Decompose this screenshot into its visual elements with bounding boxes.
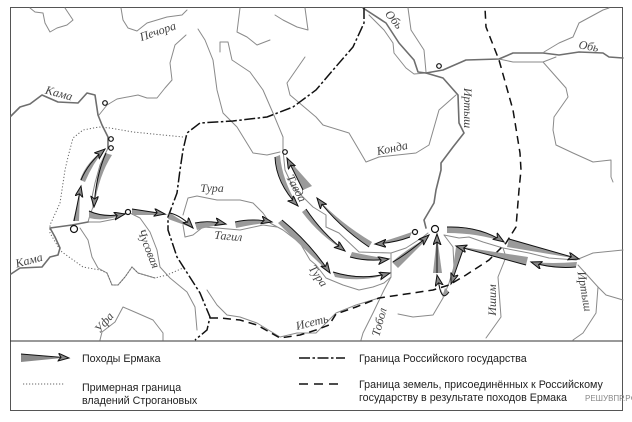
- river labels: Чусовая: [134, 227, 163, 271]
- legend: annexed text: государству в результате походов Ермака: [359, 392, 567, 404]
- river labels: Иртыш: [461, 87, 475, 128]
- river labels: Кама: [43, 83, 74, 103]
- legend: campaign arrow: [21, 354, 69, 362]
- border: annexed lands: [210, 8, 521, 338]
- river labels: Исеть: [293, 311, 330, 333]
- river labels: Ишим: [485, 284, 499, 317]
- legend: annexed line: [299, 383, 340, 385]
- legend: [21, 353, 603, 407]
- river labels: Тагил: [214, 228, 243, 244]
- river labels: Тура: [200, 181, 224, 195]
- legend: Russian state text: Граница Российского государства: [359, 353, 527, 365]
- river labels: [13, 7, 600, 338]
- river labels: Обь: [578, 37, 600, 55]
- legend: Stroganov line: [23, 383, 65, 385]
- border: Stroganov lands: [50, 127, 183, 285]
- legend: annexed text: Граница земель, присоединённых к Российскому: [359, 379, 603, 391]
- river labels: Тобол: [369, 306, 390, 338]
- legend: Stroganov text: владений Строгановых: [82, 395, 198, 407]
- rivers: [11, 8, 623, 340]
- settlement markers: [70, 64, 441, 235]
- campaign arrows: [73, 149, 579, 298]
- river labels: Обь: [382, 7, 406, 32]
- river labels: Иртыш: [574, 269, 595, 312]
- legend: Russian state line: [299, 357, 345, 359]
- river labels: Кама: [13, 250, 44, 271]
- river labels: Печора: [137, 18, 178, 44]
- border: Russian state: [168, 8, 364, 340]
- river labels: Конда: [374, 138, 409, 158]
- river labels: Тура: [306, 262, 331, 289]
- legend separator: [10, 340, 623, 342]
- river labels: Уфа: [91, 309, 117, 336]
- legend: Stroganov text: Примерная граница: [82, 382, 181, 394]
- river labels: Тавда: [283, 172, 310, 204]
- legend: campaign text: Походы Ермака: [82, 353, 161, 365]
